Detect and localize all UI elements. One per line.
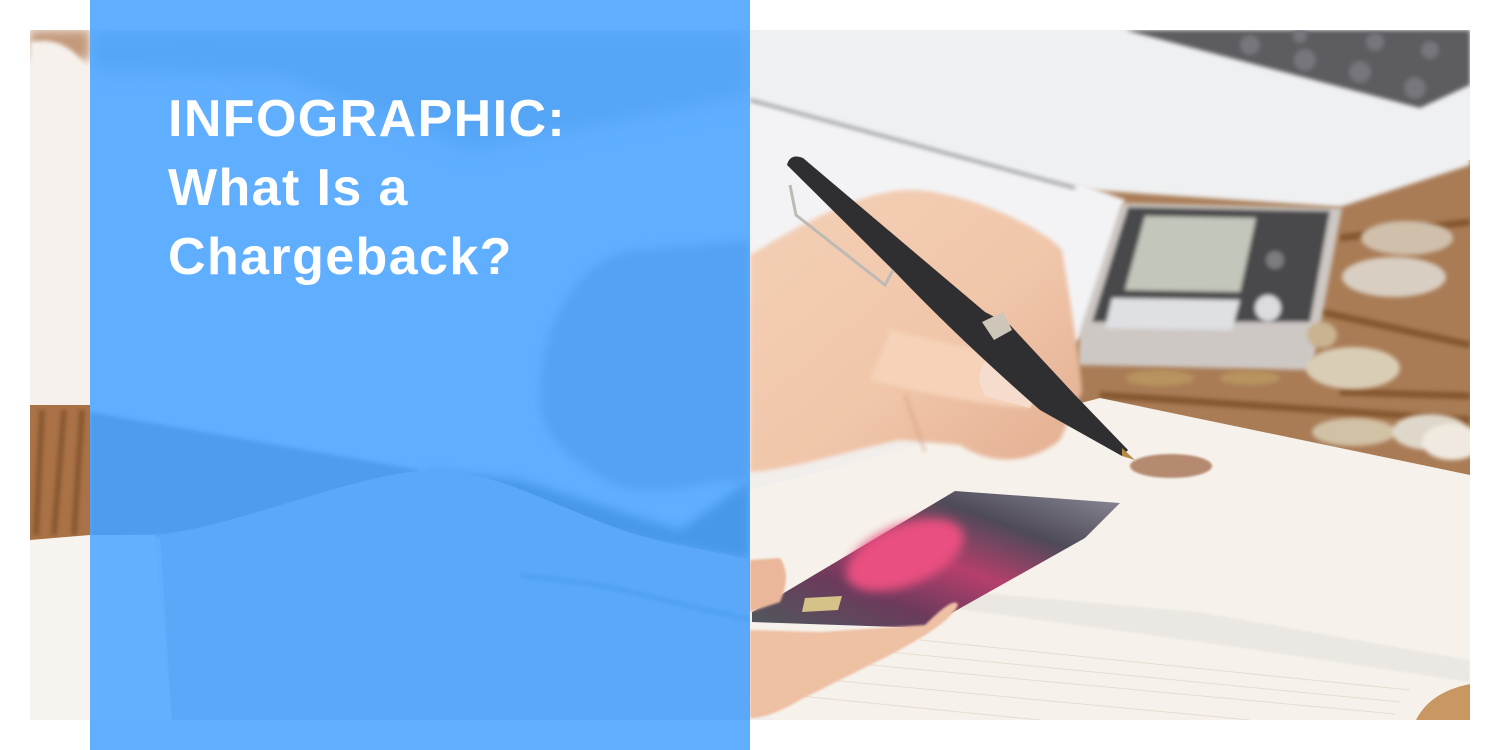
title: Chargeback? (168, 228, 513, 286)
lower hand silhouette (173, 472, 731, 556)
brown coin on notebook (1130, 454, 1212, 478)
credit card (752, 491, 1120, 628)
keyboard (1125, 30, 1470, 108)
fingers below card (750, 602, 958, 718)
pen (787, 157, 1128, 456)
photo: right side scene (750, 29, 1482, 720)
notebook corner (1416, 684, 1470, 720)
title: INFOGRAPHIC: (168, 90, 566, 148)
coins (1126, 221, 1482, 460)
title (168, 90, 566, 286)
calculator (1078, 203, 1342, 370)
hand holding pen (750, 190, 1082, 472)
paper sheets (1050, 160, 1470, 210)
notebook (1050, 398, 1470, 480)
desk wood (1050, 160, 1470, 480)
photo: blue panel (90, 0, 750, 750)
dark stripe band (90, 412, 420, 540)
title: What Is a (168, 159, 409, 217)
darker hand shape (540, 240, 750, 491)
photo: left strip (30, 30, 90, 720)
fingernail (980, 362, 1032, 408)
